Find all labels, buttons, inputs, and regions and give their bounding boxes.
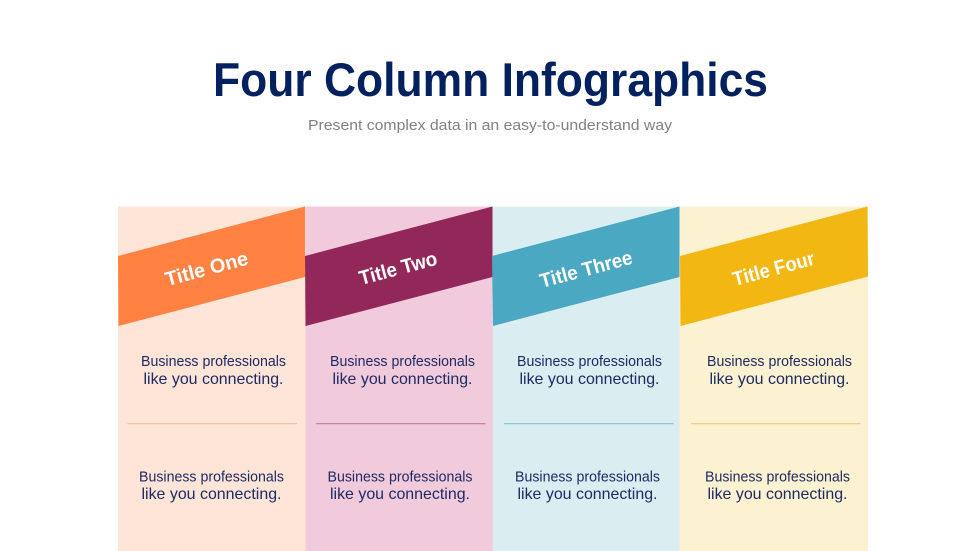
text block: lower: like you connecting. xyxy=(518,486,658,503)
text block: lower: Business professionals xyxy=(705,470,850,486)
text block: upper xyxy=(707,354,852,388)
banner: title two: Title Two xyxy=(357,248,440,290)
text block: lower: Business professionals xyxy=(515,470,660,486)
text block: lower: like you connecting. xyxy=(142,486,282,503)
text block: upper: Business professionals xyxy=(517,354,662,370)
text block: upper xyxy=(141,354,286,388)
banner: title two xyxy=(305,206,492,326)
text block: upper: Business professionals xyxy=(141,354,286,370)
panel: column one xyxy=(118,206,306,551)
text block: upper xyxy=(517,354,662,388)
text block: lower: Business professionals xyxy=(139,470,284,486)
text block: lower xyxy=(328,470,472,503)
panel: column two xyxy=(305,206,492,551)
text block: lower: Business professionals xyxy=(328,470,472,486)
banner: title one: Title One xyxy=(163,248,251,291)
panel: column three xyxy=(492,206,680,551)
text block: lower: like you connecting. xyxy=(708,486,848,503)
banner: title four: Title Four xyxy=(730,248,817,291)
text block: upper: Business professionals xyxy=(707,354,852,370)
subtitle: Present complex data in an easy-to-understand way xyxy=(308,117,673,134)
text block: lower xyxy=(515,470,660,503)
text block: lower: like you connecting. xyxy=(330,486,470,503)
banner: title one xyxy=(118,206,305,326)
text block: upper: Business professionals xyxy=(330,354,475,370)
text block: upper: like you connecting. xyxy=(332,371,472,388)
text block: upper: like you connecting. xyxy=(144,371,284,388)
text block: lower xyxy=(705,470,850,503)
text block: upper xyxy=(330,354,475,388)
banner: title three xyxy=(492,206,680,326)
title: Four Column Infographics xyxy=(213,53,768,106)
text block: lower xyxy=(139,470,284,503)
text block: upper: like you connecting. xyxy=(710,371,850,388)
panel: column four xyxy=(680,206,868,551)
banner: title three: Title Three xyxy=(538,247,635,293)
text block: upper: like you connecting. xyxy=(520,371,660,388)
banner: title four xyxy=(680,206,868,326)
